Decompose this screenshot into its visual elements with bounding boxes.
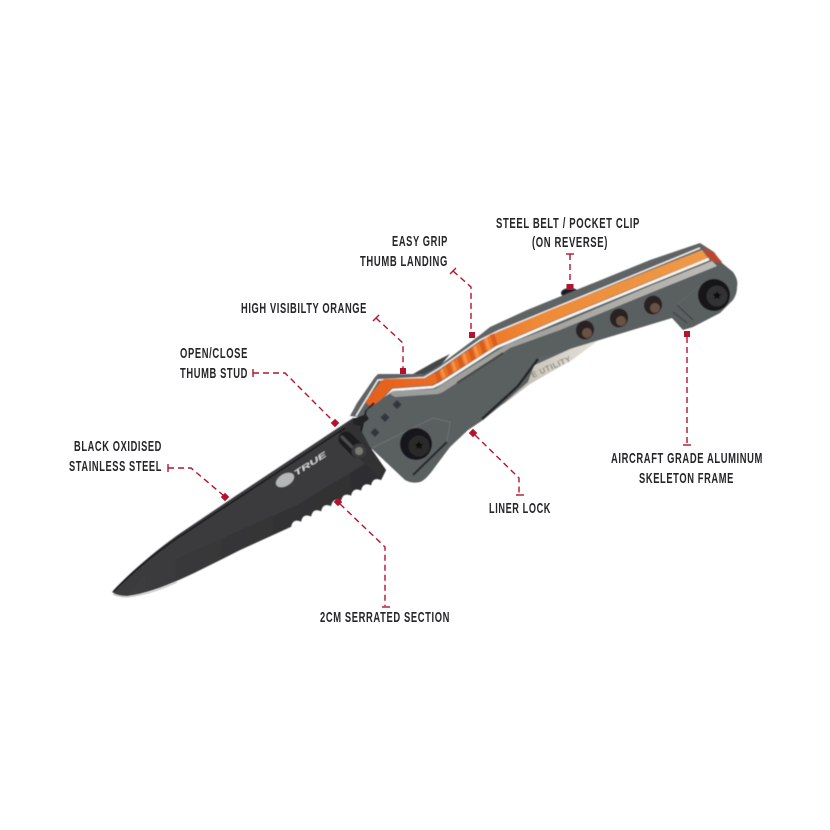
thumb stud <box>342 414 369 458</box>
callout: easy grip thumb landing: EASY GRIP <box>392 233 448 250</box>
callout: open/close thumb stud: THUMB STUD <box>180 365 248 382</box>
callout: steel belt / pocket clip <box>496 215 640 290</box>
red rear tip <box>703 248 722 264</box>
callout: easy grip thumb landing <box>360 233 475 338</box>
callout: aircraft grade aluminum skeleton frame: SKELETON FRAME <box>639 470 734 487</box>
frame groove lines <box>372 418 450 448</box>
callout: high visibility orange <box>241 300 406 374</box>
callout: steel belt / pocket clip: (ON REVERSE) <box>532 234 608 251</box>
belt clip stud <box>561 288 579 298</box>
callout: 2cm serrated section <box>320 498 450 626</box>
callout: liner lock: LINER LOCK <box>489 500 551 517</box>
dark gap beside frame <box>361 403 374 431</box>
handle spine <box>350 243 722 420</box>
white strip below orange <box>372 259 709 412</box>
orange strip <box>365 248 722 408</box>
blade logo: TRUE <box>292 449 330 478</box>
callout: high visibility orange: HIGH VISIBILTY ORANGE <box>241 300 367 317</box>
back liner with utility text <box>490 337 603 412</box>
rear screw <box>698 279 730 311</box>
callout: steel belt / pocket clip: STEEL BELT / POCKET CLIP <box>496 215 640 232</box>
back liner with utility text: E UTILITY <box>530 354 573 380</box>
callout: easy grip thumb landing: THUMB LANDING <box>360 253 448 270</box>
handle frame <box>362 261 737 483</box>
blade <box>112 418 386 597</box>
small grip dots <box>370 400 402 437</box>
callout: black oxidised stainless steel: BLACK OXIDISED <box>74 438 162 455</box>
callout: liner lock <box>469 429 551 517</box>
callout: 2cm serrated section: 2CM SERRATED SECTION <box>320 609 450 626</box>
blade logo <box>273 449 330 490</box>
thumb flap behind spine <box>413 354 450 374</box>
bevel highlight <box>390 261 717 397</box>
knife illustration <box>112 243 737 597</box>
callout: black oxidised stainless steel <box>69 438 229 501</box>
liner lock line <box>482 359 538 419</box>
front screw <box>400 428 432 460</box>
skeleton holes <box>573 293 665 342</box>
callout: black oxidised stainless steel: STAINLESS STEEL <box>69 458 162 475</box>
callout: open/close thumb stud <box>180 345 339 427</box>
callout: aircraft grade aluminum skeleton frame <box>611 331 763 487</box>
callout: open/close thumb stud: OPEN/CLOSE <box>180 345 248 362</box>
white line above orange <box>356 248 700 416</box>
